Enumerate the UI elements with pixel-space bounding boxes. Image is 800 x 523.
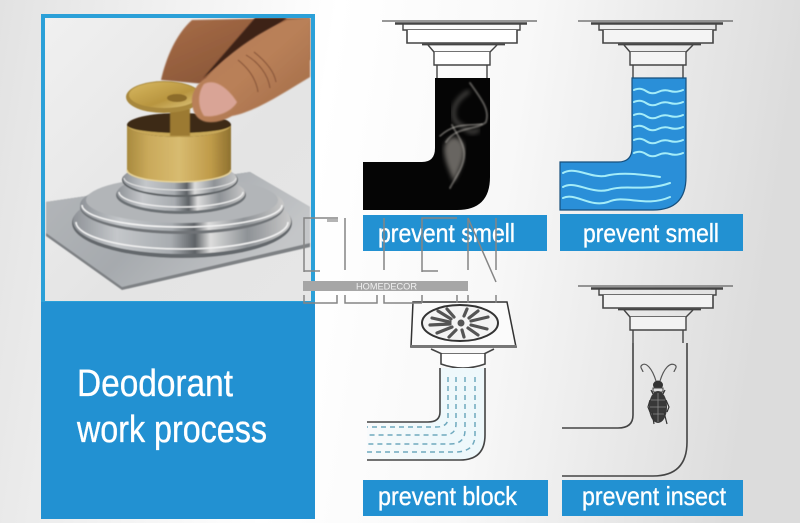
water pipe bbox=[560, 78, 686, 210]
label text: prevent smell bbox=[583, 218, 719, 248]
photo: finger shadow bbox=[203, 18, 287, 78]
diagram: prevent insect, empty pipe with cockroach bbox=[562, 286, 743, 516]
photo: brass lid bbox=[126, 81, 202, 113]
drain flange bbox=[578, 21, 733, 78]
diagram: prevent smell, black pipe with smoke bbox=[363, 21, 547, 251]
panel: title block bbox=[41, 302, 315, 519]
drain flange bbox=[382, 21, 537, 78]
flowing pipe bbox=[367, 368, 485, 460]
label bar bbox=[363, 215, 547, 251]
diagram: prevent block, floor drain with flowing pipe bbox=[363, 302, 548, 516]
black pipe bbox=[363, 78, 490, 210]
label text: prevent smell bbox=[378, 218, 515, 248]
water waves bbox=[563, 89, 683, 203]
photo: thumb bbox=[192, 18, 310, 122]
icon: cockroach bbox=[641, 364, 676, 424]
drain neck bbox=[431, 349, 494, 368]
label text: prevent insect bbox=[582, 481, 727, 511]
floor drain plate bbox=[411, 302, 516, 348]
flow dashes bbox=[367, 377, 475, 452]
label bar bbox=[363, 480, 548, 516]
label bar bbox=[562, 480, 743, 516]
photo: brass stem bbox=[170, 108, 190, 136]
label text: prevent block bbox=[378, 481, 518, 511]
photo: thumbnail bbox=[199, 82, 237, 116]
title: work process: work process bbox=[76, 409, 267, 451]
photo: brass cup bbox=[127, 113, 231, 182]
watermark bar bbox=[303, 281, 468, 291]
photo: index finger bbox=[161, 18, 310, 84]
empty pipe bbox=[562, 343, 687, 476]
diagram: prevent smell, water-filled pipe bbox=[560, 21, 743, 251]
watermark text: HOMEDECOR bbox=[356, 282, 417, 292]
title: Deodorant: Deodorant bbox=[77, 363, 233, 405]
drain flange bbox=[578, 286, 733, 343]
watermark letter outlines bbox=[304, 218, 496, 303]
panel: blue photo frame bbox=[43, 16, 313, 303]
watermark: ELLEN HOMEDECOR bbox=[303, 218, 496, 303]
label bar bbox=[560, 214, 743, 251]
photo: thumb creases bbox=[238, 52, 276, 92]
panel: product photo bbox=[43, 16, 313, 302]
smoke bbox=[440, 83, 487, 188]
photo: drain base plate and steel rings bbox=[46, 163, 310, 290]
